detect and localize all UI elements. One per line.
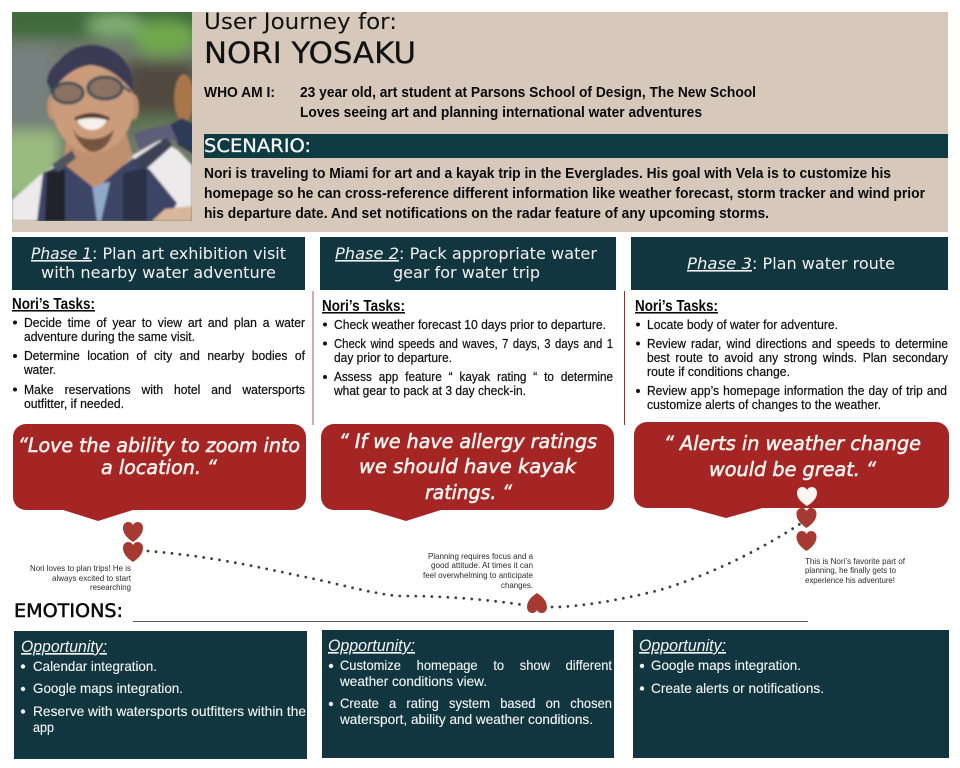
callout: phase 2 quote (321, 424, 614, 521)
callout: phase 3 quote: “ Alerts in weather change (664, 432, 921, 455)
caption: phase 2 emotion: Planning requires focus and a (428, 551, 533, 561)
text block: phase 1 tasks: Make reservations with hotel and watersports (24, 382, 305, 397)
panel: phase 1 opportunity: Calendar integration. (33, 659, 157, 674)
text block: phase 3 tasks: customize alerts of changes to the weather. (647, 397, 881, 412)
caption: phase 1 emotion: always excited to start (52, 573, 132, 583)
caption: phase 2 emotion: feel overwhelming to anticipate (423, 570, 533, 580)
dotted emotion curve (148, 524, 800, 607)
text block: phase 1 tasks: outfitter, if needed. (24, 396, 124, 411)
panel: phase 3 opportunity: Opportunity: (639, 637, 726, 655)
icon: white heart phase 3 (797, 487, 817, 506)
caption: phase 1 emotion: Nori loves to plan trips! He is (30, 563, 131, 573)
panel: phase 1 opportunity: Google maps integration. (33, 681, 183, 696)
caption: phase 2 emotion: changes. (501, 580, 533, 590)
text: who am I: WHO AM I: (204, 84, 275, 101)
caption: phase 2 emotion (423, 551, 533, 590)
panel: phase 1 opportunity: app (33, 720, 54, 735)
panel: phase 1 opportunity (14, 631, 307, 759)
heading: user journey title (204, 10, 416, 70)
text block: phase 1 tasks: Nori’s Tasks: (12, 296, 95, 313)
text block: phase 2 tasks: Check weather forecast 10 days prior to departure. (334, 317, 606, 332)
panel: phase 2 opportunity: Opportunity: (328, 637, 415, 655)
photo: Nori in kayak gear (12, 12, 192, 221)
panel: phase 1 header (12, 237, 305, 290)
text block: phase 3 tasks (635, 298, 949, 412)
panel: phase 1 header: Phase 1 (31, 244, 92, 263)
text block: phase 1 tasks (12, 296, 306, 411)
panel: phase 2 header: : Pack appropriate water (399, 244, 597, 263)
text: who am I: 23 year old, art student at Parsons School of Design, The New School (300, 84, 756, 101)
text: scenario description: Nori is traveling to Miami for art and a kayak trip in the Everglades. His goal with Vela is to customize his (204, 165, 891, 182)
panel: phase 2 header: gear for water trip (393, 263, 540, 282)
icon: heart low phase 3 (796, 531, 816, 551)
panel: phase 1 opportunity: Opportunity: (21, 638, 107, 656)
text block: phase 2 tasks: what gear to pack at 3 day check-in. (333, 383, 526, 398)
text block: phase 3 tasks: best route to avoid any strong winds. Plan secondary (647, 350, 949, 365)
panel: phase 1 header: with nearby water adventure (41, 263, 276, 282)
heading: scenario band: SCENARIO: (204, 135, 311, 157)
text block: phase 2 tasks: Assess app feature “ kayak rating “ to determine (334, 369, 613, 384)
heading: user journey title: User Journey for: (204, 10, 397, 35)
panel: phase 2 opportunity: weather conditions view. (339, 674, 487, 689)
panel: phase 2 opportunity (322, 630, 614, 758)
icon: heart low phase 1 (123, 542, 143, 562)
icon: heart middle phase 3 (796, 508, 816, 528)
callout: phase 2 quote: we should have kayak (359, 455, 577, 478)
caption: phase 3 emotion: planning, he finally gets to (805, 565, 896, 575)
panel: phase 3 opportunity: Google maps integration. (651, 658, 801, 673)
caption: phase 1 emotion (30, 563, 132, 592)
text block: phase 3 tasks: route if conditions change. (647, 364, 790, 379)
callout: phase 2 quote: “ If we have allergy ratings (339, 430, 597, 453)
chart: emotion journey line (123, 487, 817, 613)
caption: phase 3 emotion (805, 556, 906, 585)
heading: user journey title: NORI YOSAKU (204, 36, 416, 70)
panel: phase 2 header (320, 237, 616, 290)
callout: phase 1 quote (13, 424, 306, 521)
text block: phase 1 tasks: Determine location of city and nearby bodies of (24, 348, 305, 363)
callout: phase 3 quote: would be great. “ (709, 458, 877, 481)
callout: phase 1 quote: “Love the ability to zoom into (18, 434, 300, 457)
icon: heart phase 2 (527, 593, 547, 613)
text: who am I: Loves seeing art and planning international water adventures (300, 104, 702, 121)
icon: heart high phase 1 (123, 522, 143, 542)
caption: phase 2 emotion: good attitude. At times it can (431, 560, 533, 570)
panel: phase 3 header (631, 237, 948, 290)
text: scenario description (204, 165, 925, 222)
panel: phase 2 opportunity: watersport, ability and weather conditions. (339, 712, 593, 727)
panel: phase 2 opportunity: Create a rating system based on chosen (340, 696, 612, 711)
panel: phase 3 header: : Plan water route (752, 254, 895, 273)
caption: phase 1 emotion: researching (90, 582, 131, 592)
callout: phase 1 quote: a location. “ (101, 456, 218, 479)
text block: phase 1 tasks: Decide time of year to view art and plan a water (24, 315, 306, 330)
callout: phase 3 quote (634, 422, 949, 518)
panel: phase 3 header: Phase 3 (687, 254, 752, 273)
text block: phase 2 tasks: day prior to departure. (334, 350, 452, 365)
text block: phase 1 tasks: water. (23, 362, 56, 377)
text block: phase 2 tasks: Check wind speeds and waves, 7 days, 3 days and 1 (334, 336, 613, 351)
caption: phase 3 emotion: experience his adventure! (805, 575, 895, 585)
panel: persona header (0, 0, 948, 232)
heading: emotions: EMOTIONS: (14, 600, 123, 622)
text block: phase 1 tasks: adventure during the same visit. (24, 329, 195, 344)
panel: phase 2 opportunity: Customize homepage to show different (340, 658, 612, 673)
callout: phase 2 quote: ratings. “ (425, 481, 513, 504)
text block: phase 2 tasks (322, 298, 613, 398)
heading: scenario band (204, 134, 948, 158)
panel: phase 3 opportunity: Create alerts or notifications. (651, 681, 824, 696)
caption: phase 3 emotion: This is Nori’s favorite part of (805, 556, 906, 566)
panel: phase 1 header: : Plan art exhibition visit (92, 244, 286, 263)
panel: phase 3 opportunity (633, 630, 949, 758)
panel: phase 1 opportunity: Reserve with watersports outfitters within the (33, 704, 306, 719)
text block: phase 2 tasks: Nori’s Tasks: (322, 298, 405, 315)
text block: phase 3 tasks: Locate body of water for adventure. (647, 317, 838, 332)
text block: phase 3 tasks: Nori’s Tasks: (635, 298, 718, 315)
text block: phase 3 tasks: Review app’s homepage information the day of trip and (647, 383, 947, 398)
panel: phase 2 header: Phase 2 (335, 244, 399, 263)
text: who am I (204, 84, 756, 121)
text: scenario description: his departure date. And set notifications on the radar feature of any upcoming storms. (204, 205, 769, 222)
